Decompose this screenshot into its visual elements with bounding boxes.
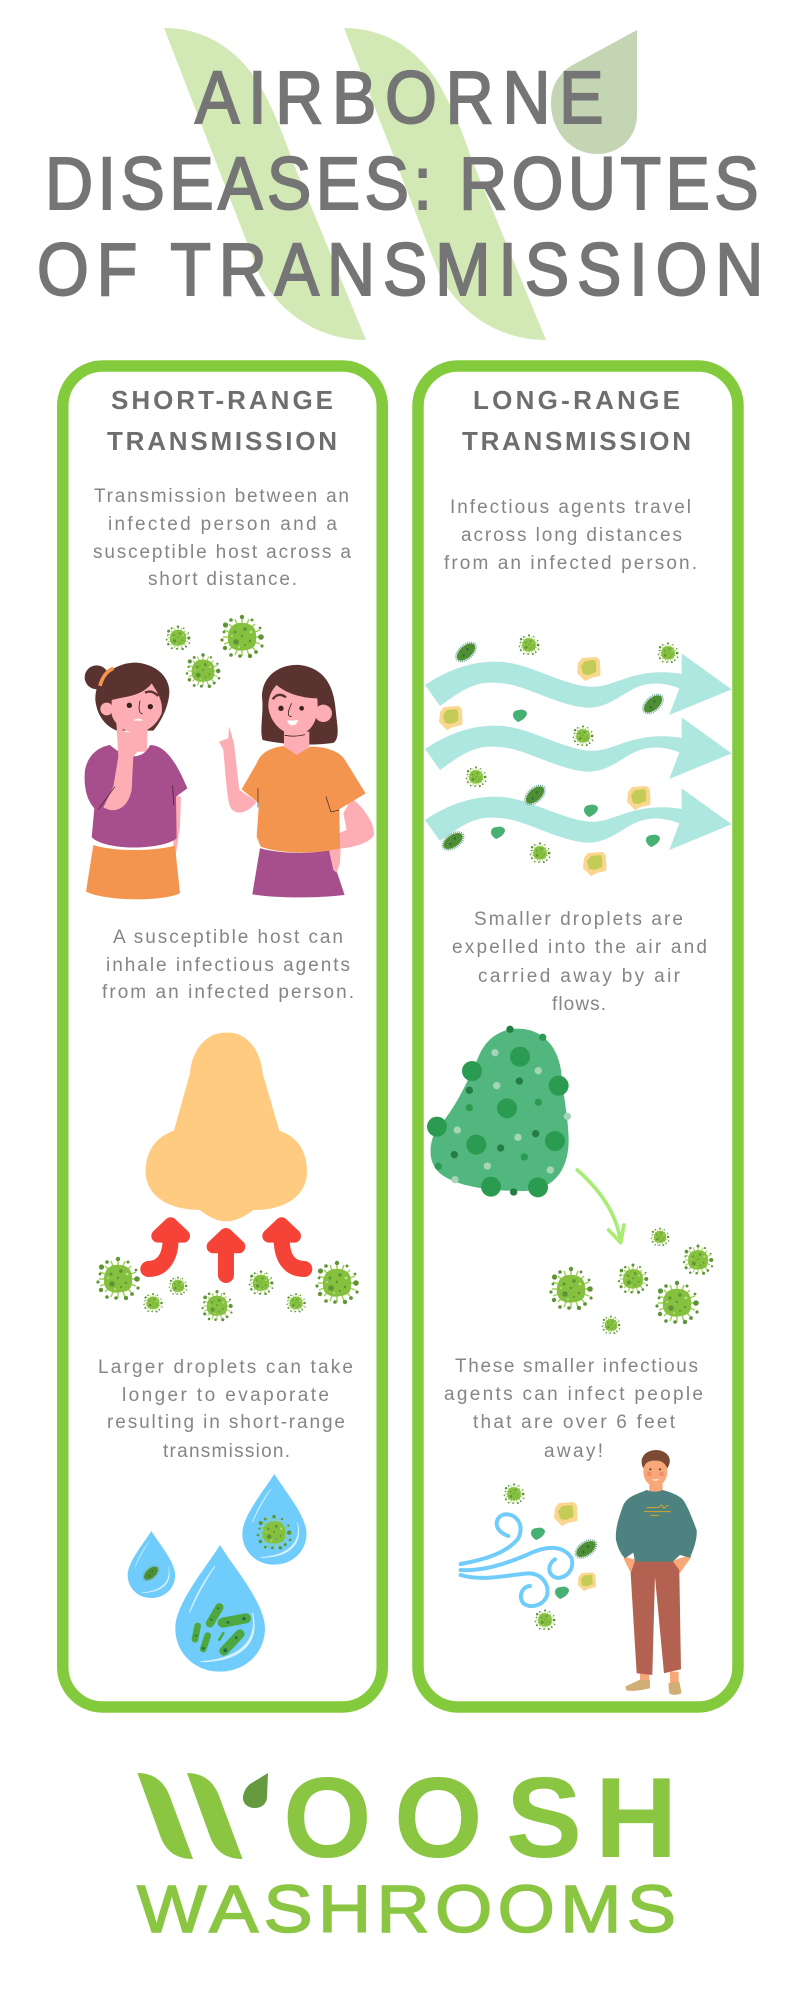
particles in wind — [504, 1483, 600, 1630]
heading: short-range: TRANSMISSION — [107, 426, 337, 456]
small droplet — [128, 1531, 175, 1598]
text: short-range intro: Transmission between an — [94, 486, 349, 507]
wind swirls — [461, 1514, 572, 1606]
panel: long-range transmission — [418, 366, 738, 1707]
heading: long-range: LONG-RANGE — [473, 385, 680, 415]
illustration: wind and man — [461, 1450, 697, 1695]
text: susceptible host: inhale infectious agents — [106, 955, 350, 976]
woman pointing — [219, 665, 374, 897]
text: larger droplets: transmission. — [163, 1441, 290, 1462]
text: over 6 feet: that are over 6 feet — [473, 1412, 676, 1433]
text: smaller droplets: Smaller droplets are — [474, 909, 683, 930]
background logo watermark — [164, 28, 637, 340]
illustration: nose — [146, 1033, 307, 1275]
illustration: wavy air flow arrows — [425, 653, 732, 850]
text: over 6 feet: These smaller infectious — [455, 1356, 698, 1377]
man in teal sweater — [616, 1450, 697, 1695]
text: larger droplets: resulting in short-range — [107, 1412, 345, 1433]
title: AIRBORNE — [195, 56, 604, 139]
text: short-range intro — [93, 486, 351, 590]
text: larger droplets: Larger droplets can take — [98, 1357, 353, 1378]
text: short-range intro: susceptible host across a — [93, 542, 351, 563]
text: smaller droplets: carried away by air — [478, 966, 681, 987]
title — [37, 56, 763, 311]
heading: long-range — [462, 385, 691, 456]
illustration: large droplet spreading particles — [427, 1026, 624, 1243]
panel: short-range transmission — [63, 366, 382, 1707]
viruses under the nose — [96, 1257, 359, 1321]
text: long-range intro: across long distances — [461, 525, 682, 546]
text: long-range intro — [444, 497, 697, 574]
text: susceptible host: from an infected person. — [102, 982, 354, 1003]
illustration: two women talking — [85, 663, 374, 899]
text: susceptible host: A susceptible host can — [113, 927, 343, 948]
title: DISEASES: ROUTES — [45, 142, 759, 225]
text: smaller droplets: flows. — [552, 994, 606, 1015]
text: smaller droplets — [452, 909, 707, 1015]
big droplet — [175, 1545, 265, 1672]
woman thinking — [85, 663, 187, 899]
text: smaller droplets: expelled into the air and — [452, 937, 707, 958]
text: larger droplets — [98, 1357, 353, 1462]
text: over 6 feet: agents can infect people — [444, 1384, 703, 1405]
heading: long-range: TRANSMISSION — [462, 426, 691, 456]
airborne particles — [439, 634, 678, 876]
text: short-range intro: infected person and a — [108, 514, 337, 535]
logo: woosh washrooms — [137, 1755, 677, 1946]
text: over 6 feet: away! — [544, 1441, 603, 1462]
text: larger droplets: longer to evaporate — [122, 1385, 329, 1406]
text: over 6 feet — [444, 1356, 703, 1462]
logo mark — [138, 1773, 268, 1859]
heading: short-range — [107, 385, 337, 456]
text: long-range intro: Infectious agents travel — [450, 497, 691, 518]
heading: short-range: SHORT-RANGE — [111, 385, 333, 415]
viruses above the women — [166, 615, 264, 688]
text: long-range intro: from an infected person. — [444, 553, 697, 574]
logo wordmark: OOSH — [283, 1755, 677, 1882]
illustration: water droplets with germs — [128, 1474, 307, 1672]
text: susceptible host — [102, 927, 354, 1003]
medium droplet — [242, 1474, 307, 1565]
logo subtitle: WASHROOMS — [137, 1871, 676, 1946]
smaller viruses from droplet — [549, 1227, 713, 1334]
curved green arrow — [577, 1170, 624, 1243]
title: OF TRANSMISSION — [37, 228, 763, 311]
text: short-range intro: short distance. — [148, 569, 297, 590]
red inhalation arrows — [148, 1224, 304, 1275]
